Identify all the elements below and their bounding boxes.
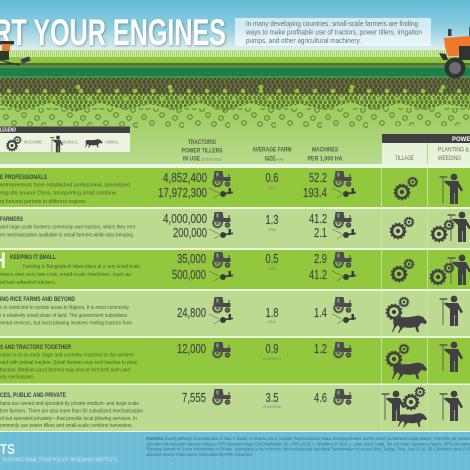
column headers: (HA) [275,156,285,162]
row 2 description [0,217,135,238]
icon: orange tractor [439,27,470,78]
row 5: animals and tractors together [0,342,463,380]
footer logo [0,441,119,464]
row 1 figures: 4,852,400 [163,171,207,185]
row 6 figures [182,389,352,409]
power source header: TILLAGE [395,155,414,162]
row 3 power icons [391,255,470,285]
row 4: rice farms and beyond [0,296,463,333]
row 5 description: traction. Medium-sized farmers may own or rent both oxen and [0,368,130,374]
row 6 description [0,393,143,429]
row 4 description [0,297,132,326]
column headers: AVERAGE FARM [252,146,292,154]
row 2 description: FARMERS [0,217,23,223]
column headers: SIZE [264,156,276,162]
row 6 description: hana are owned and operated by private medium- and large-scale [0,401,139,407]
row 4 figures: 24,800 [177,306,206,320]
table row backgrounds [0,164,470,432]
footer logo: INTERNATIONAL FOOD POLICY RESEARCH INSTITUTE [3,458,119,464]
row 4 figures: 2012 [267,320,277,324]
footer panel [0,432,470,470]
row 1 figures: 52.2 [309,171,327,185]
row 6: services, public and private [0,387,463,429]
sources: agriculture surveys. Power source: Observations by IFPRI researchers. [146,452,253,457]
intro text block: ways to make profitable use of tractors, power tillers, irrigation [245,28,422,36]
row 5 description [0,345,138,380]
legend: animal: ANIMAL [105,140,119,144]
row 4 power icons [386,296,463,333]
row 1: the professionals [0,171,463,205]
row 1 figures: 2010 [267,186,277,190]
icon: farmer with power tiller [0,41,31,65]
column headers: IN USE [183,156,201,162]
row 1 figures: 0.6 [266,171,279,185]
row 2 figures: 2.1 [314,226,327,240]
row 2: farmers [0,212,470,242]
column headers: 2010/2012 [200,156,223,162]
row 3: keeping it small [0,248,470,286]
row 4 description: r a relatively small share of land. The government subsidizes [0,313,127,319]
row 4 figures: 1.4 [314,306,327,320]
row 6 description: ommonly use power tillers and small-scale combine harvesters. [0,423,133,429]
row 5 figures: 0.9 [266,342,279,356]
column headers: TRACTORS/ [188,139,216,146]
row 3 description [0,255,140,286]
soil and seedling field [0,78,470,168]
sources [146,436,470,457]
row 3 description: Farming in Bangladesh takes place at a very small scale [23,264,140,270]
power source header: WEEDING [438,155,461,162]
row 6 power icons [382,387,463,428]
power source header [382,134,470,164]
footer logo: TS [0,441,15,458]
field and grass bands [0,50,470,78]
row 2 description: and large-scale farmers commonly own tractors, which they rent [0,224,135,230]
legend: LEGEND [0,128,16,134]
row 3 figures: 2.9 [314,252,327,266]
row 1 description: migrate around China, transporting small combine [0,190,116,196]
row 6 figures: 2005/2006 [262,405,282,409]
row 6 description: CES, PUBLIC AND PRIVATE [0,393,66,399]
row 3 figures: 0.5 [266,252,279,266]
row 3 description: rmers own very low-cost, small-scale machines, such as [0,272,131,278]
row 6 figures: 4.6 [314,391,327,405]
row 6 figures: 3.5 [266,391,279,405]
column headers [182,139,343,162]
row 3 figures [172,252,356,282]
row 6 figures: 7,555 [182,391,206,405]
row 4 description: ING RICE FARMS AND BEYOND [0,297,76,303]
row 3 figures: 2009 [267,267,277,271]
row 1 figures [158,171,356,200]
row 5 description: ned with animal traction. Small farmers may rent tractors to plow [0,360,138,366]
row 1 description: entrepreneurs have established professional, specialized [0,182,130,188]
row 2 figures: 4,000,000 [163,212,207,226]
row 5 figures: 2012/2013 [262,357,282,361]
row 2 figures: 1.3 [266,213,279,227]
legend: manual: MANUAL [62,140,78,144]
row 1 power icons [394,174,463,204]
intro text block [235,18,431,46]
column headers: POWER TILLERS [182,148,223,154]
row 5 description: ully mechanized. [0,374,34,380]
row 6 description: ther farmers. There are also more than 80 subsidized mechanization [0,408,143,414]
row 2 figures [163,212,356,240]
row 5 figures: 1.2 [314,342,327,356]
legend: machine: MACHINE [24,140,42,144]
row 3 figures: 35,000 [177,252,206,266]
row 2 figures: 41.2 [309,212,327,226]
row 1 description: E PROFESSIONALS [0,175,47,181]
row 1 figures: 17,972,300 [158,186,207,200]
row 5 power icons [386,342,463,380]
row 2 figures: 2003 [267,228,277,232]
column headers: PER 1,000 HA [308,156,343,162]
row 1 figures: 193.4 [303,186,327,200]
row 3 figures: 500,000 [172,268,206,282]
row 5 description: S AND TRACTORS TOGETHER [0,345,72,351]
row 5 figures [177,342,352,361]
row 3 figures: 41.2 [309,268,327,282]
row 5 description: ration is at an early stage and currently restricted to the western [0,352,134,358]
row 4 figures [177,297,356,324]
sky background [0,0,470,51]
row 1 description: nt harvest periods in different regions. [0,199,87,205]
intro text block: pumps, and other agricultural machinery. [246,36,361,45]
row 1 description [0,175,130,205]
row 4 figures: 1.8 [266,306,279,320]
row 4 description: n is restricted to certain areas in Nigeria. It is most commonly [0,305,129,311]
intro text block: In many developing countries, small-scale farmers are finding [246,19,418,28]
row 6 description: nt but operated privately—that provide local plowing services. In [0,416,137,422]
row 4 description: rental services, but most plowing involves renting tractors from [0,320,132,326]
row 2 figures: 200,000 [173,226,207,240]
row 3 description: nd two-wheeled tractors. [0,280,56,286]
column headers: MACHINES [312,146,339,154]
row 5 figures: 12,000 [177,342,206,356]
row 2 description: es mechanization available to small farmers while also bringing [0,232,133,238]
row 3 description: KEEPING IT SMALL [10,255,56,261]
legend [0,126,130,152]
row 2 power icons [390,212,470,242]
